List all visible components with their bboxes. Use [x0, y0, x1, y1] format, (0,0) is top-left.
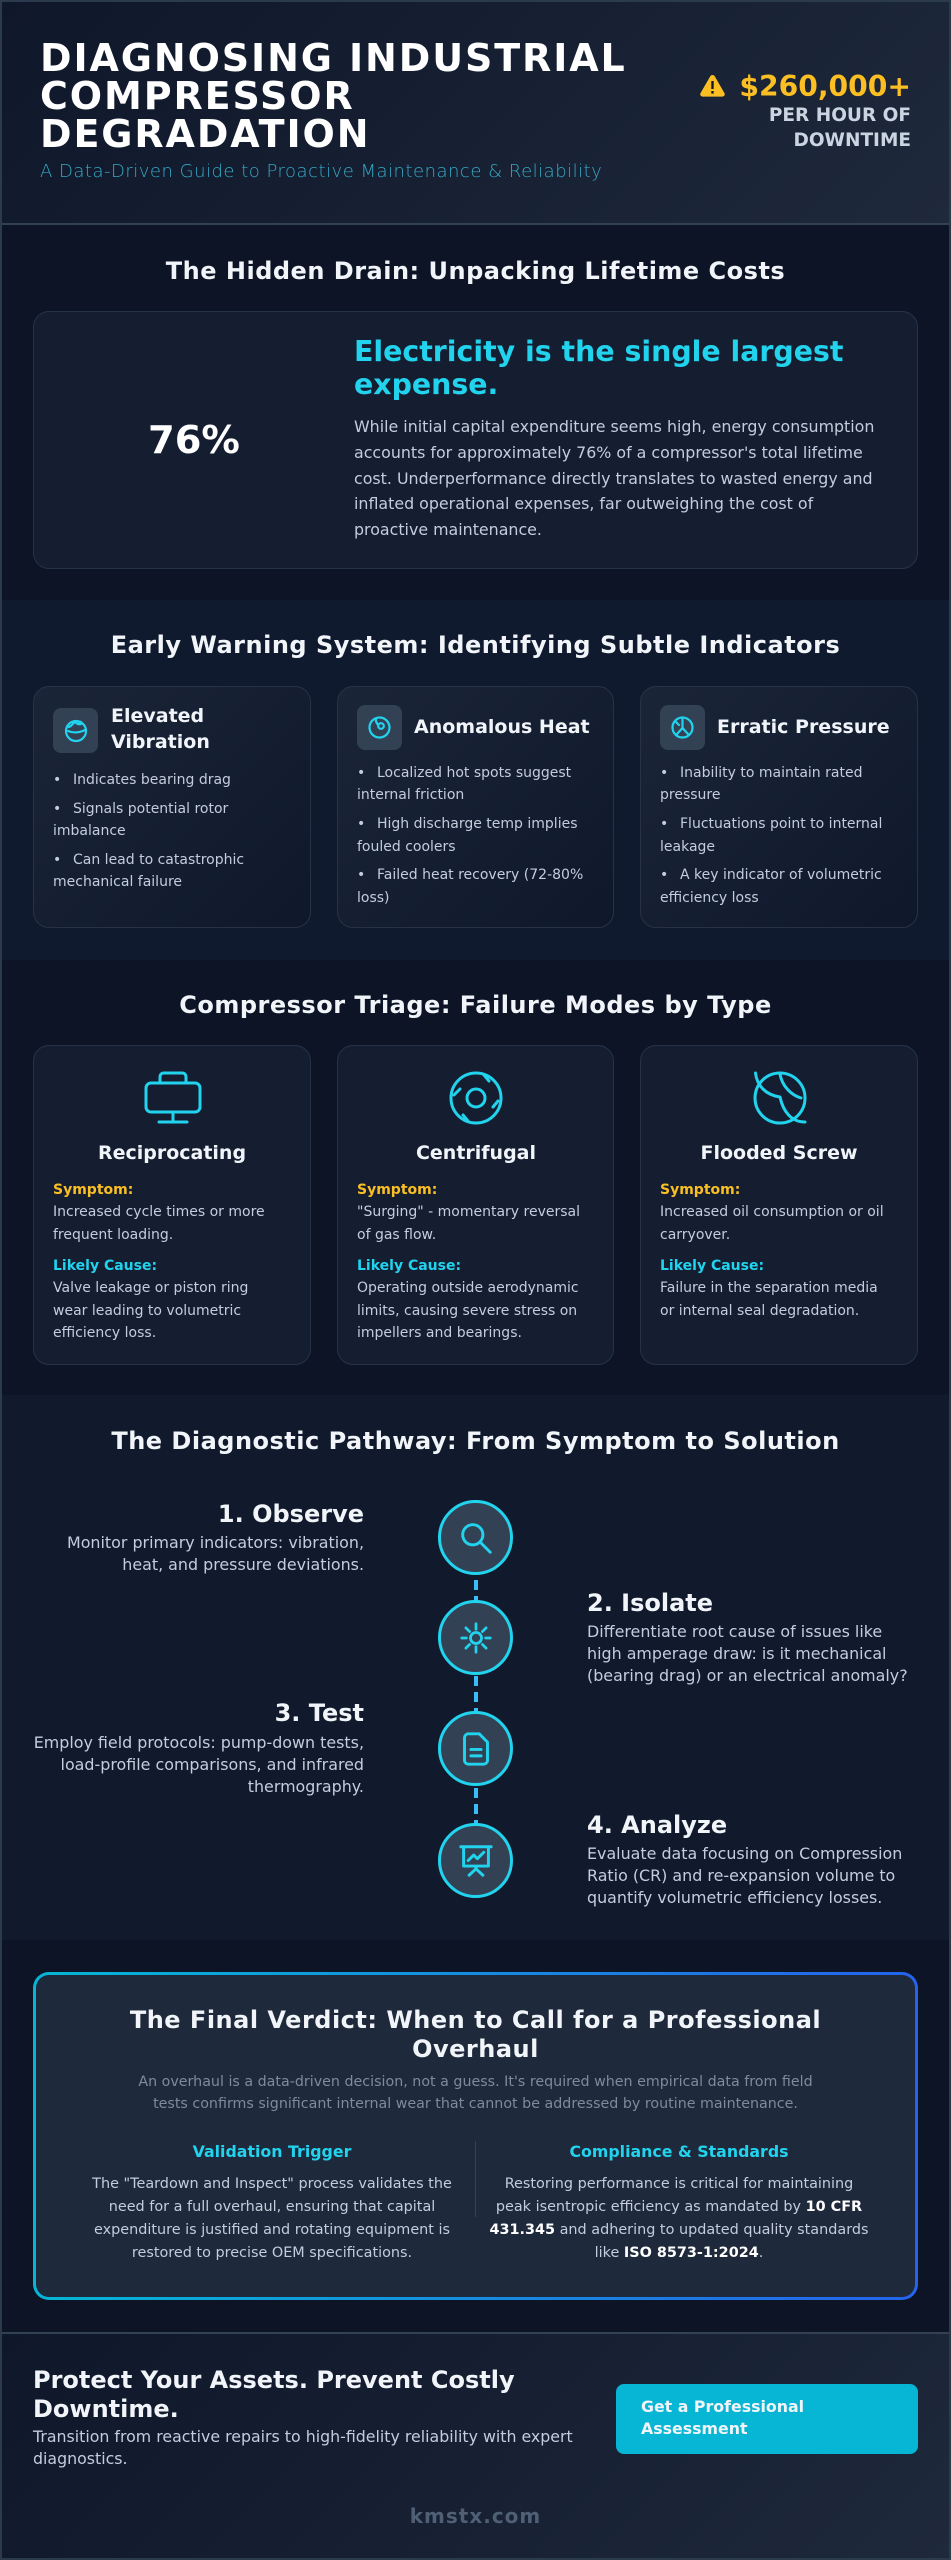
- column text: [489, 2176, 868, 2261]
- column title: Compliance & Standards: [569, 2142, 789, 2161]
- main title: [40, 36, 627, 156]
- indicator list: Can lead to catastrophic: [73, 852, 244, 868]
- section: early warning: [0, 600, 951, 960]
- indicator list: Localized hot spots suggest: [377, 765, 571, 781]
- step 3 title: 3. Test: [275, 1699, 364, 1727]
- verdict intro: tests confirms significant internal wear that cannot be addressed by routine maintenance.: [153, 2096, 798, 2112]
- heading: The Hidden Drain: Unpacking Lifetime Costs: [166, 257, 785, 285]
- likely cause: limits, causing severe stress on: [357, 1303, 577, 1319]
- step 3 text: thermography.: [248, 1777, 364, 1796]
- indicator list: Inability to maintain rated: [680, 765, 862, 781]
- step 2 title: 2. Isolate: [587, 1589, 713, 1617]
- indicator list: [357, 765, 583, 906]
- likely cause: Operating outside aerodynamic: [357, 1280, 579, 1296]
- indicator list: mechanical failure: [53, 874, 182, 890]
- card title: Elevated: [111, 705, 204, 727]
- column text: like ISO 8573-1:2024.: [595, 2245, 763, 2261]
- step 4 text: Evaluate data focusing on Compression: [587, 1844, 902, 1863]
- cta text: [32, 2427, 573, 2468]
- step 4 title: 4. Analyze: [587, 1811, 727, 1839]
- heading: The Diagnostic Pathway: From Symptom to Solution: [111, 1427, 840, 1455]
- cost figure: $260,000+: [739, 70, 911, 103]
- cta button: [616, 2384, 918, 2454]
- indicator list: loss): [357, 890, 390, 906]
- downtime cost callout: [700, 70, 911, 151]
- likely cause: [53, 1258, 248, 1341]
- column: compliance and standards: [489, 2142, 868, 2261]
- card title: Erratic Pressure: [717, 716, 890, 738]
- indicator list: Failed heat recovery (72-80%: [377, 867, 583, 883]
- main title: DIAGNOSING INDUSTRIAL: [40, 36, 627, 80]
- card: flooded screw: [640, 1045, 918, 1365]
- card title: Anomalous Heat: [414, 716, 590, 738]
- callout headline: Electricity is the single largest: [354, 335, 843, 368]
- type title: Centrifugal: [416, 1142, 536, 1164]
- likely cause: efficiency loss.: [53, 1325, 156, 1341]
- main title: COMPRESSOR: [40, 74, 355, 118]
- symptom: "Surging" - momentary reversal: [357, 1204, 580, 1220]
- indicator list: imbalance: [53, 823, 126, 839]
- column text: [92, 2176, 452, 2261]
- column text: Restoring performance is critical for maintaining: [505, 2176, 853, 2192]
- column text: expenditure is justified and rotating equipment is: [94, 2222, 450, 2238]
- section: diagnostic pathway: [0, 1395, 951, 1940]
- card title: [111, 705, 210, 753]
- card: centrifugal: [337, 1045, 614, 1365]
- cta text: diagnostics.: [33, 2449, 128, 2468]
- step 3 text: Employ field protocols: pump-down tests,: [34, 1733, 364, 1752]
- indicator list: [660, 765, 882, 906]
- verdict box: [33, 1972, 918, 2300]
- symptom: of gas flow.: [357, 1227, 436, 1243]
- likely cause: Failure in the separation media: [660, 1280, 878, 1296]
- step 4 text: [587, 1844, 902, 1907]
- indicator list: High discharge temp implies: [377, 816, 577, 832]
- heading: Compressor Triage: Failure Modes by Type: [179, 991, 772, 1019]
- likely cause: Likely Cause:: [660, 1258, 764, 1274]
- likely cause: [660, 1258, 878, 1319]
- heading: Early Warning System: Identifying Subtle Indicators: [111, 631, 840, 659]
- likely cause: Valve leakage or piston ring: [53, 1280, 248, 1296]
- cta text: Transition from reactive repairs to high-fidelity reliability with expert: [33, 2427, 573, 2446]
- button label: Get a Professional: [641, 2397, 804, 2416]
- verdict intro: An overhaul is a data-driven decision, not a guess. It's required when empirical data from field: [138, 2074, 813, 2090]
- header banner: [0, 0, 951, 225]
- step 1 title: 1. Observe: [218, 1500, 364, 1528]
- icon: vibration: [53, 708, 98, 753]
- card: reciprocating: [33, 1045, 311, 1365]
- icon: impeller: [450, 1072, 502, 1124]
- column text: restored to precise OEM specifications.: [132, 2245, 412, 2261]
- symptom: Increased oil consumption or oil: [660, 1204, 884, 1220]
- stat card: [33, 311, 918, 569]
- icon: reciprocating compressor: [144, 1072, 202, 1124]
- symptom: [357, 1182, 580, 1243]
- callout headline: [354, 335, 843, 400]
- node 2: gear light: [438, 1600, 513, 1675]
- step 3 text: load-profile comparisons, and infrared: [61, 1755, 364, 1774]
- card: anomalous heat: [337, 686, 614, 928]
- symptom: carryover.: [660, 1227, 730, 1243]
- main title: DEGRADATION: [40, 112, 370, 156]
- indicator list: pressure: [660, 787, 720, 803]
- step 4 text: Ratio (CR) and re-expansion volume to: [587, 1866, 895, 1885]
- button label: Assessment: [641, 2419, 748, 2438]
- verdict intro: [138, 2074, 813, 2112]
- indicator list: [53, 772, 244, 890]
- verdict title: [130, 2006, 821, 2063]
- symptom and cause: Symptom:: [53, 1182, 133, 1198]
- likely cause: [357, 1258, 579, 1341]
- step 1 text: heat, and pressure deviations.: [122, 1555, 364, 1574]
- explanation: accounts for approximately 76% of a compressor's total lifetime: [354, 443, 863, 462]
- likely cause: wear leading to volumetric: [53, 1303, 241, 1319]
- verdict title: The Final Verdict: When to Call for a Professional: [130, 2006, 821, 2034]
- step 2 text: [587, 1622, 908, 1685]
- explanation: proactive maintenance.: [354, 520, 542, 539]
- card: elevated vibration: [33, 686, 311, 928]
- verdict title: Overhaul: [412, 2035, 539, 2063]
- footer call to action: [0, 2332, 951, 2560]
- step 4 text: quantify volumetric efficiency losses.: [587, 1888, 882, 1907]
- section: final verdict: [0, 1940, 951, 2332]
- step 1 text: Monitor primary indicators: vibration,: [67, 1533, 364, 1552]
- explanation: inflated operational expenses, far outweighing the cost of: [354, 494, 813, 513]
- indicator list: internal friction: [357, 787, 464, 803]
- type title: Flooded Screw: [700, 1142, 858, 1164]
- likely cause: or internal seal degradation.: [660, 1303, 859, 1319]
- symptom: Symptom:: [357, 1182, 437, 1198]
- symptom and cause: frequent loading.: [53, 1227, 173, 1243]
- divider: [475, 2141, 476, 2217]
- explanation: cost. Underperformance directly translates to wasted energy and: [354, 468, 873, 488]
- cost caption: DOWNTIME: [793, 130, 911, 151]
- brand url: kmstx.com: [410, 2504, 541, 2528]
- explanation: [354, 417, 874, 539]
- indicator list: Signals potential rotor: [73, 801, 228, 817]
- indicator list: A key indicator of volumetric: [680, 867, 882, 883]
- card title: Vibration: [111, 731, 210, 753]
- indicator list: efficiency loss: [660, 890, 759, 906]
- column: validation trigger: [92, 2142, 452, 2261]
- likely cause: impellers and bearings.: [357, 1325, 522, 1341]
- indicator list: Fluctuations point to internal: [680, 816, 882, 832]
- node 3: document: [438, 1711, 513, 1786]
- icon: heat: [357, 705, 402, 750]
- likely cause: Likely Cause:: [53, 1258, 157, 1274]
- column text: peak isentropic efficiency as mandated by 10 CFR: [496, 2199, 862, 2215]
- column text: need for a full overhaul, ensuring that capital: [109, 2199, 435, 2215]
- cta headline: Protect Your Assets. Prevent Costly: [33, 2366, 515, 2394]
- card: erratic pressure: [640, 686, 918, 928]
- step 3 text: [34, 1733, 364, 1796]
- column text: The "Teardown and Inspect" process validates the: [92, 2176, 452, 2192]
- type title: Reciprocating: [98, 1142, 246, 1164]
- icon: warning triangle: [700, 75, 725, 97]
- symptom: Symptom:: [660, 1182, 740, 1198]
- cta headline: Downtime.: [33, 2395, 179, 2423]
- section: the hidden drain: [0, 225, 951, 600]
- step 2 text: Differentiate root cause of issues like: [587, 1622, 882, 1641]
- step 2 text: (bearing drag) or an electrical anomaly?: [587, 1666, 908, 1685]
- column text: 431.345 and adhering to updated quality standards: [489, 2222, 868, 2238]
- subtitle: A Data-Driven Guide to Proactive Maintenance & Reliability: [40, 161, 602, 182]
- indicator list: Indicates bearing drag: [73, 772, 231, 788]
- cost caption: [769, 105, 911, 151]
- icon: pressure gauge: [660, 705, 705, 750]
- icon: screw rotor: [754, 1072, 806, 1124]
- step 2 text: high amperage draw: is it mechanical: [587, 1644, 886, 1663]
- symptom and cause: [53, 1182, 265, 1243]
- dashed connector: [474, 1500, 478, 1898]
- symptom: [660, 1182, 884, 1243]
- step 1 text: [67, 1533, 364, 1574]
- node 4: presentation chart: [438, 1823, 513, 1898]
- symptom and cause: Increased cycle times or more: [53, 1204, 265, 1220]
- explanation: While initial capital expenditure seems high, energy consumption: [354, 417, 874, 436]
- 76 percent stat: 76%: [148, 418, 240, 463]
- section: compressor triage: [0, 960, 951, 1395]
- node 1: magnifier: [438, 1500, 513, 1575]
- callout headline: expense.: [354, 368, 498, 400]
- indicator list: leakage: [660, 839, 715, 855]
- indicator list: fouled coolers: [357, 839, 456, 855]
- cost caption: PER HOUR OF: [769, 105, 911, 126]
- column title: Validation Trigger: [193, 2142, 351, 2161]
- button label: [641, 2397, 804, 2438]
- likely cause: Likely Cause:: [357, 1258, 461, 1274]
- cta headline: [33, 2366, 515, 2423]
